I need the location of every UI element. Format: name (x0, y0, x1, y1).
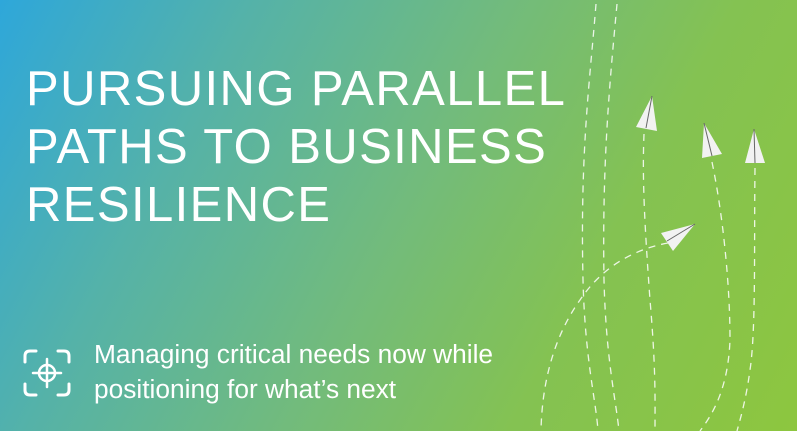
icon: paper plane 4 (661, 224, 695, 251)
icon: paper plane 1 (636, 96, 657, 131)
title (26, 62, 566, 232)
title: PATHS TO BUSINESS (26, 120, 547, 174)
subtitle: Managing critical needs now while (94, 339, 493, 369)
icon: target crosshair (24, 350, 70, 396)
title: RESILIENCE (26, 178, 331, 232)
title: PURSUING PARALLEL (26, 62, 566, 116)
subtitle: positioning for what’s next (94, 374, 396, 404)
subtitle (94, 339, 493, 404)
icon: paper plane 2 (702, 123, 722, 158)
icon: paper plane 3 (745, 129, 765, 163)
